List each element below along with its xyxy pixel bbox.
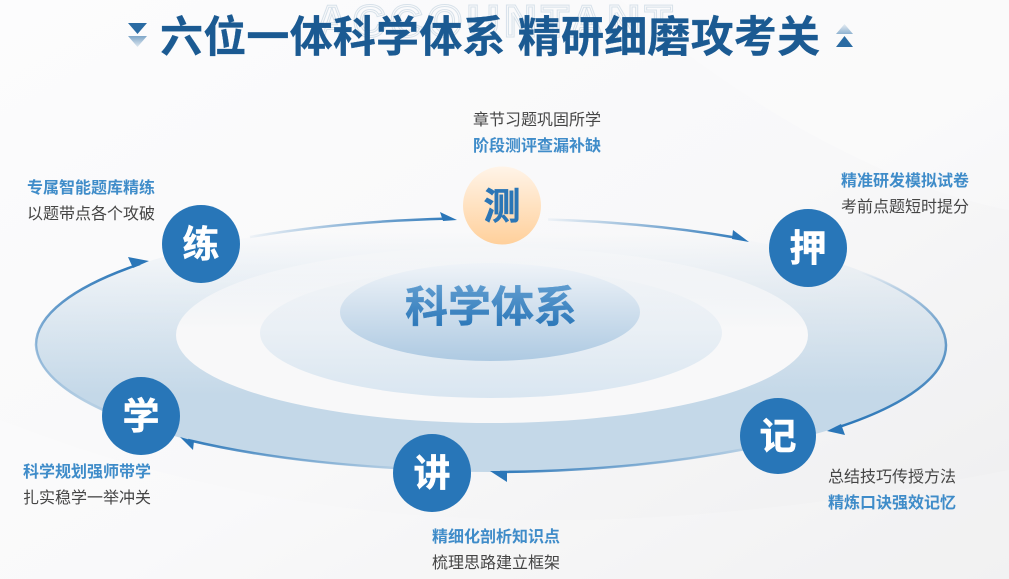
core ellipse — [340, 263, 640, 361]
white ring — [176, 247, 808, 423]
text block: 讲 — [432, 527, 560, 572]
node: 学 — [102, 377, 180, 455]
diagram: concentric ellipses — [36, 218, 946, 472]
text block: 测: 章节习题巩固所学 — [473, 111, 601, 129]
text block: 练: 以题带点各个攻破 — [27, 205, 155, 223]
node: 押: 押 — [790, 228, 826, 269]
core label: 科学体系 — [405, 284, 577, 332]
arrow: 讲 to 学 — [180, 437, 395, 468]
text block: 测: 阶段测评查漏补缺 — [473, 136, 601, 155]
node: 测 — [463, 166, 541, 244]
text block: 押: 精准研发模拟试卷 — [841, 171, 969, 190]
node: 练 — [162, 205, 240, 283]
node: 练: 练 — [182, 224, 220, 265]
arrow: 记 to 讲 — [490, 449, 745, 482]
text block: 讲: 精细化剖析知识点 — [432, 527, 560, 546]
node: 讲: 讲 — [414, 453, 450, 494]
text block: 测 — [473, 111, 601, 155]
text block: 讲: 梳理思路建立框架 — [432, 554, 560, 572]
node: 学: 学 — [122, 396, 160, 437]
text block: 押 — [841, 171, 969, 216]
text block: 练: 专属智能题库精练 — [27, 178, 155, 197]
arrow: 测 to 押 — [548, 220, 749, 242]
node: 押 — [769, 209, 847, 287]
text block: 学: 扎实稳学一举冲关 — [23, 489, 151, 507]
text block: 学 — [23, 462, 151, 507]
node: 测: 测 — [484, 186, 520, 227]
text block: 练 — [27, 178, 155, 223]
text block: 押: 考前点题短时提分 — [841, 198, 969, 216]
arrow: 押 to 记 — [827, 267, 946, 435]
title: 六位一体科学体系 精研细磨攻考关 — [160, 14, 820, 62]
text block: 记: 精炼口诀强效记忆 — [828, 493, 956, 512]
icon: left title triangles — [128, 23, 147, 47]
node: 记: 记 — [760, 416, 796, 457]
text block: 学: 科学规划强师带学 — [23, 462, 151, 481]
text block: 记: 总结技巧传授方法 — [828, 468, 956, 486]
arrow: 练 to 测 — [250, 212, 457, 237]
node: 记 — [740, 398, 816, 474]
outer ring — [36, 218, 946, 472]
node: 讲 — [393, 434, 471, 512]
middle ellipse — [260, 268, 722, 398]
arrow: 学 to 练 — [36, 257, 149, 411]
text block: 记 — [828, 468, 956, 512]
icon: right title triangles — [836, 24, 853, 47]
